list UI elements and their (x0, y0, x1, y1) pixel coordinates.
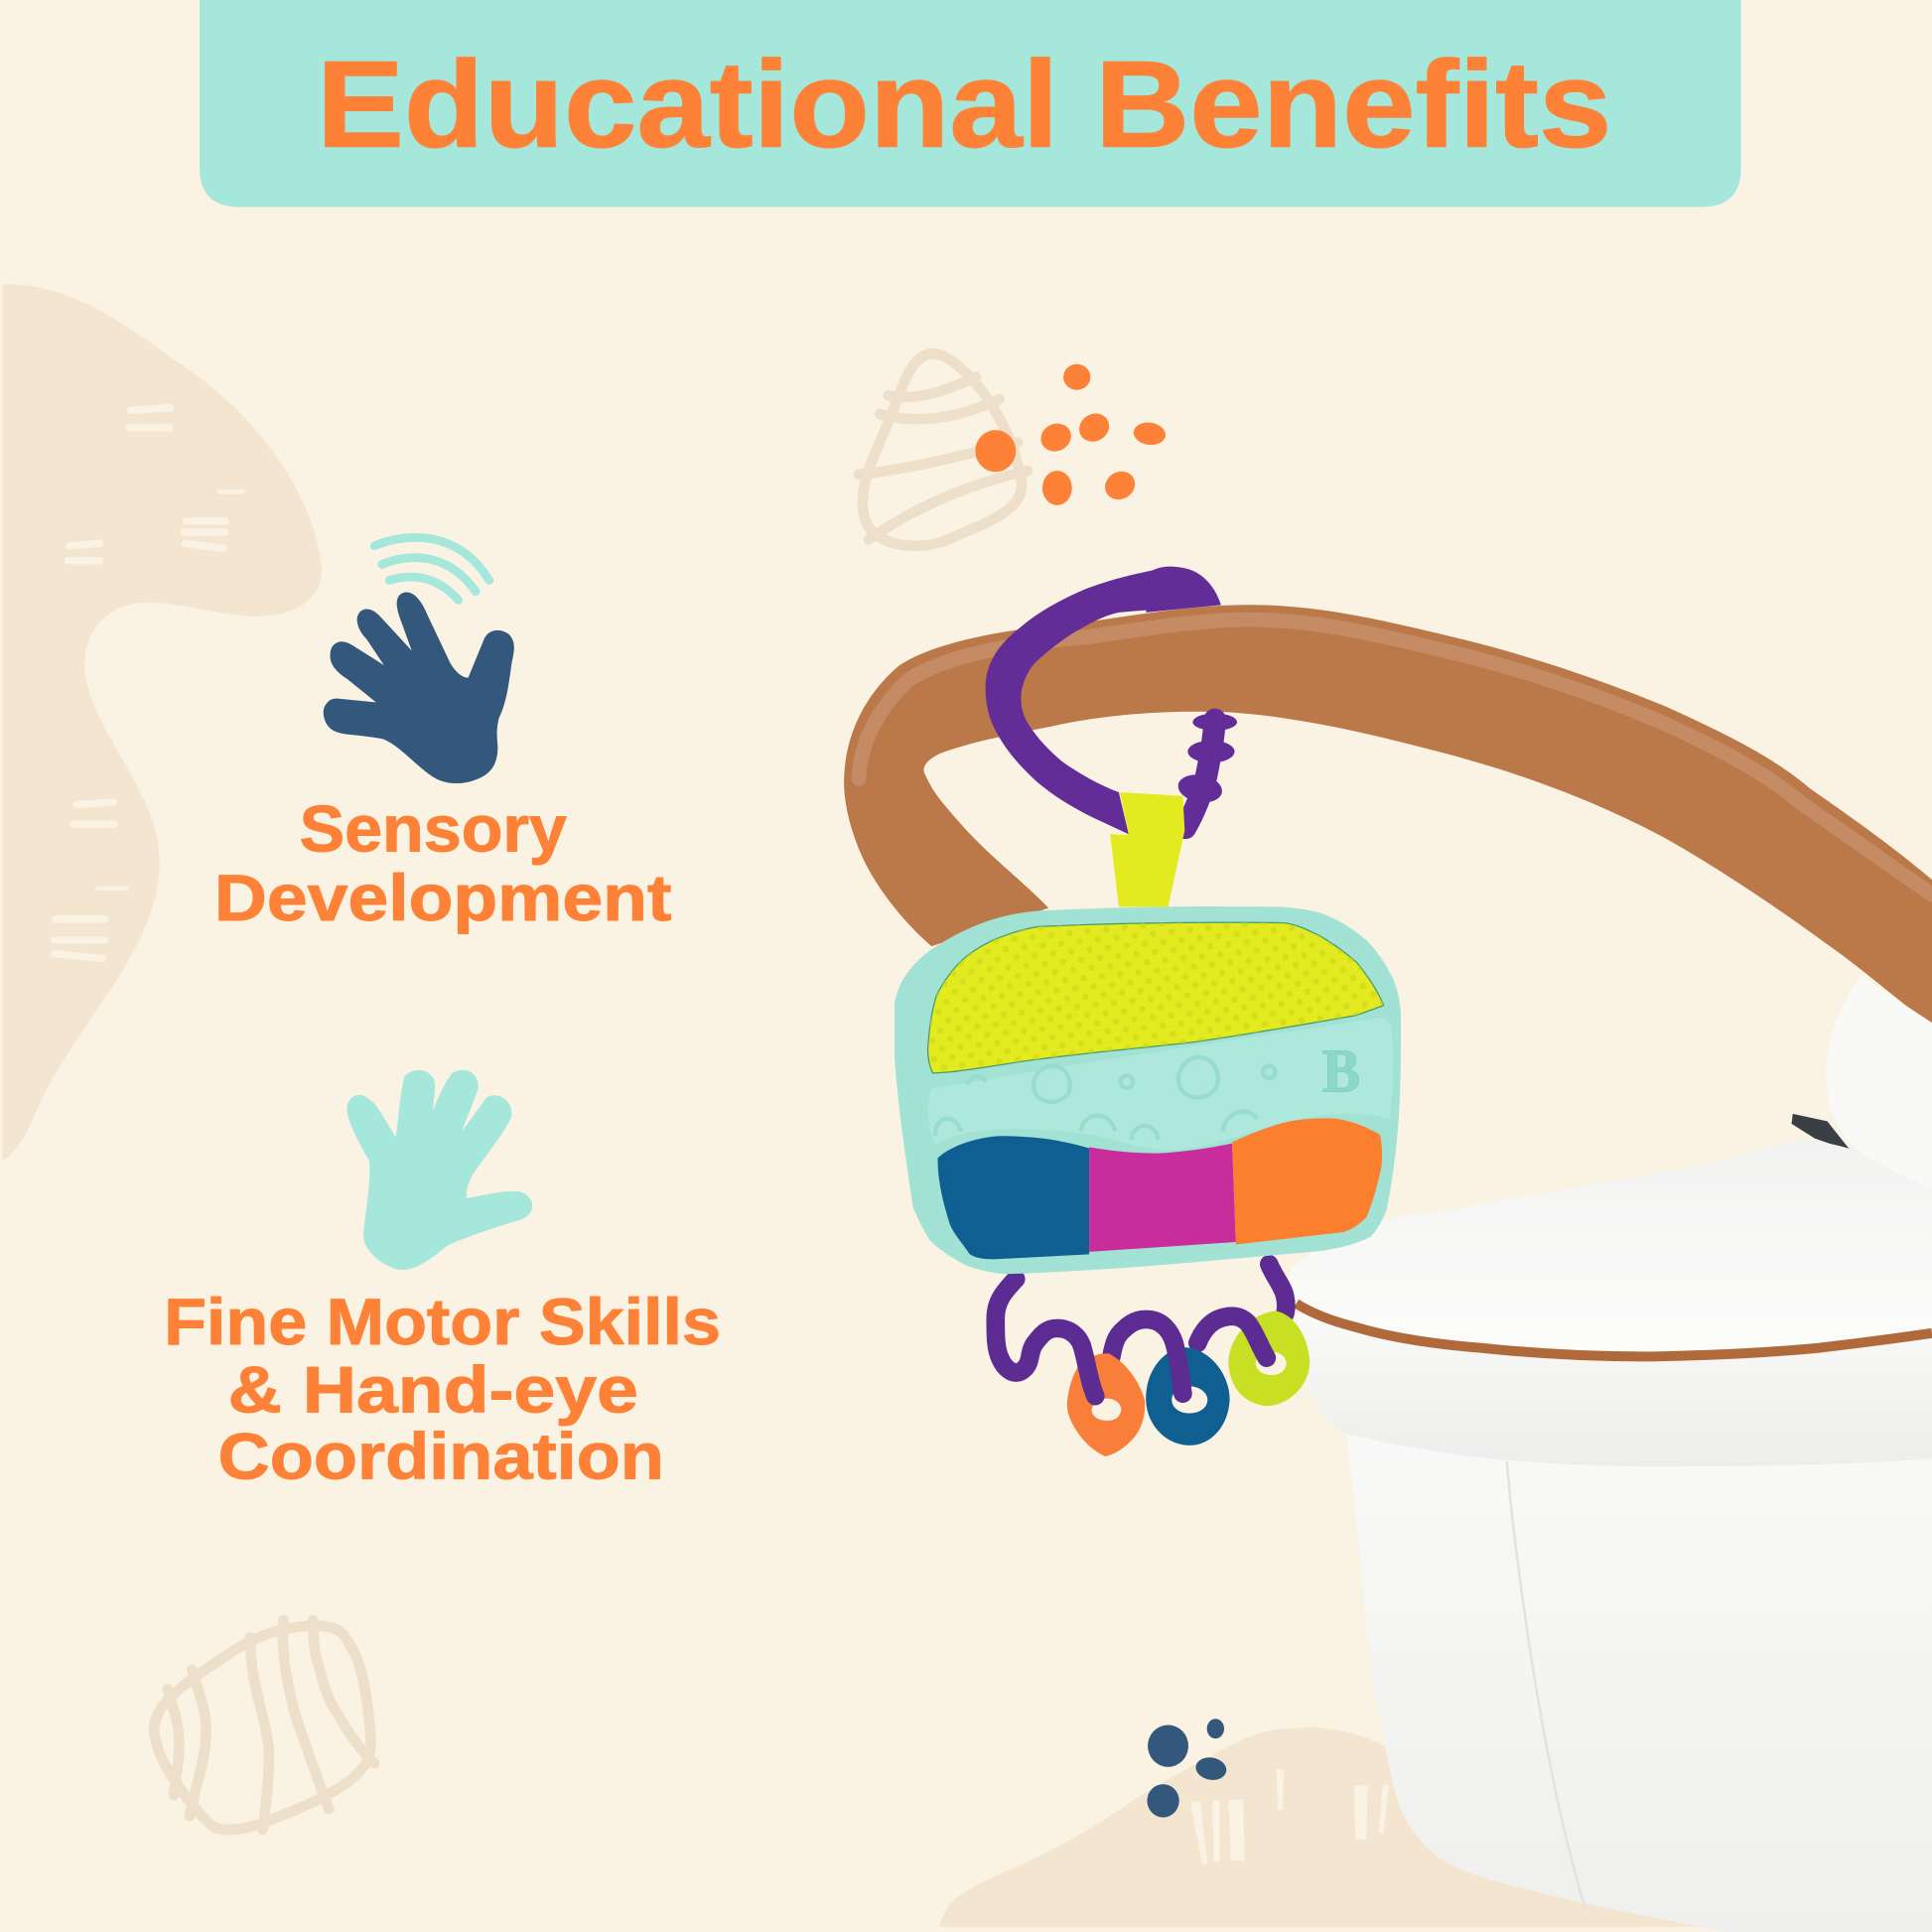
decorative scribble: barrel (154, 1620, 374, 1830)
basket leather piping (1297, 1304, 1932, 1356)
basket rim (1297, 1307, 1932, 1466)
basket cushion (1289, 1140, 1932, 1354)
icon: fine motor hand (350, 1074, 528, 1266)
handle highlight (859, 620, 1932, 895)
toy ring (986, 569, 1165, 834)
toy logo: B (1322, 1038, 1360, 1106)
icon: navy dots (1147, 1719, 1228, 1818)
stroller basket (1289, 976, 1932, 1932)
toy wires (996, 1264, 1286, 1373)
toy beaded strap (1175, 714, 1237, 828)
title: Educational Benefits (317, 37, 1611, 174)
label: sensory development (214, 792, 671, 934)
toy embossed strip (928, 1018, 1393, 1150)
basket clip (1792, 1114, 1851, 1151)
toy yellow strap (1110, 792, 1184, 906)
icon: orange dots (1036, 364, 1167, 505)
label: fine motor skills: Fine Motor Skills (164, 1285, 721, 1358)
toy orange key (1232, 1118, 1382, 1244)
basket body (1346, 1435, 1932, 1932)
label: fine motor skills (164, 1285, 721, 1492)
toy dangling rings (1067, 1311, 1310, 1456)
label: sensory development: Development (214, 861, 671, 934)
label: sensory development: Sensory (300, 792, 567, 866)
decorative blob: bottom (939, 1727, 1725, 1927)
label: fine motor skills: Coordination (218, 1419, 664, 1492)
decorative blob: left (2, 284, 322, 1161)
toy blue key (937, 1136, 1089, 1259)
toy magenta key (1089, 1144, 1236, 1252)
basket seam (1507, 1461, 1586, 1910)
icon: sensory hand with waves (327, 537, 510, 779)
toy body (895, 906, 1401, 1274)
stroller handle (844, 605, 1932, 1026)
icon: egg overlapping orange dot (975, 430, 1016, 472)
toy top of ring behind handle (1146, 567, 1221, 613)
toy yellow panel (928, 922, 1384, 1073)
decorative scribble: egg (859, 353, 1028, 546)
basket pillow (1826, 976, 1932, 1187)
label: fine motor skills: & Hand-eye (228, 1352, 638, 1426)
header banner (200, 0, 1741, 207)
